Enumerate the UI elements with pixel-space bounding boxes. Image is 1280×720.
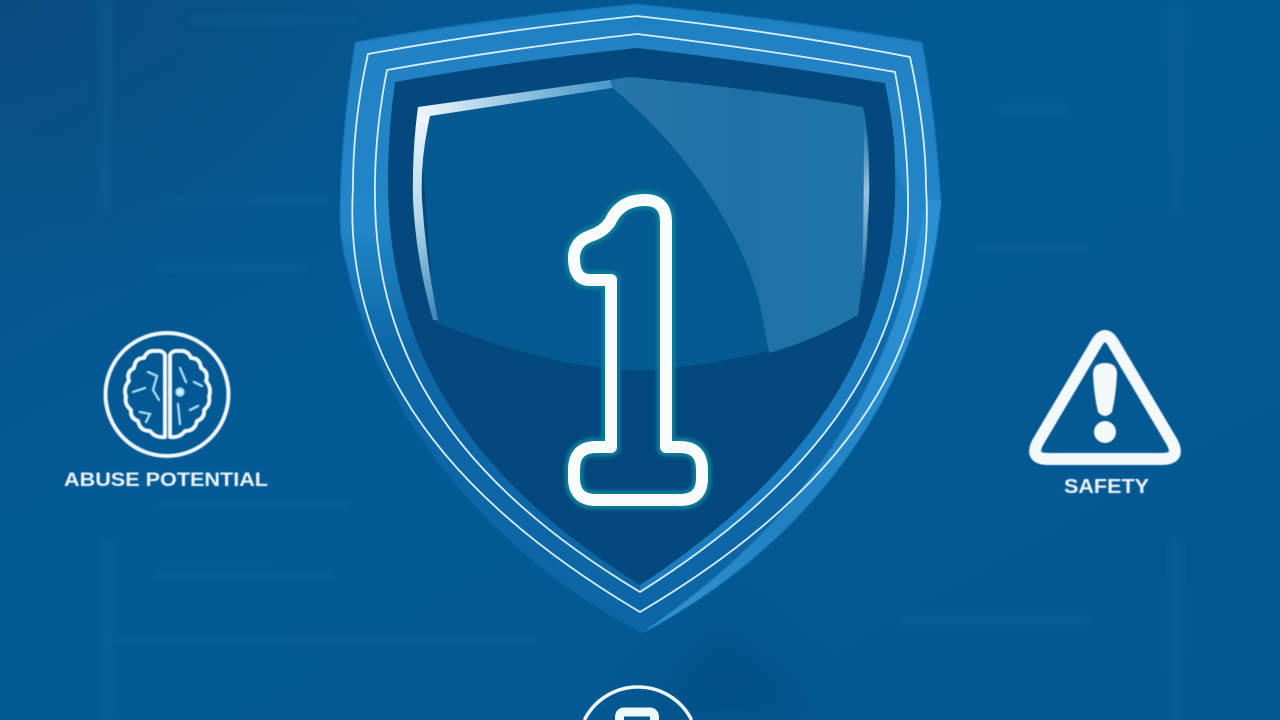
brain details bbox=[133, 368, 202, 424]
icon: warning triangle bbox=[1035, 336, 1175, 459]
shield bbox=[340, 4, 941, 633]
bottom icon bbox=[584, 687, 692, 720]
brain right hemisphere bbox=[170, 351, 210, 437]
shield inner right band bbox=[640, 167, 908, 592]
shield glass panel bbox=[413, 77, 869, 370]
label: abuse potential: ABUSE POTENTIAL bbox=[64, 470, 268, 491]
safety item bbox=[1035, 336, 1175, 498]
glass reflection bbox=[610, 77, 869, 353]
glass highlight right edge bbox=[862, 126, 870, 292]
abuse potential item bbox=[64, 333, 268, 491]
shield inner line bbox=[375, 34, 908, 592]
label: safety: SAFETY bbox=[1064, 476, 1150, 498]
glass highlight top bbox=[418, 80, 612, 116]
number one bbox=[574, 200, 702, 500]
shield inner dark field bbox=[388, 48, 895, 585]
shield outer line bbox=[352, 16, 927, 612]
glass highlight left bbox=[413, 107, 438, 320]
background bbox=[0, 0, 790, 716]
brain left hemisphere bbox=[125, 351, 165, 437]
shield outer band bbox=[340, 4, 941, 380]
icon: brain in circle bbox=[106, 333, 228, 456]
shield lower base bbox=[340, 200, 941, 633]
shield right lower edge bbox=[642, 200, 941, 633]
